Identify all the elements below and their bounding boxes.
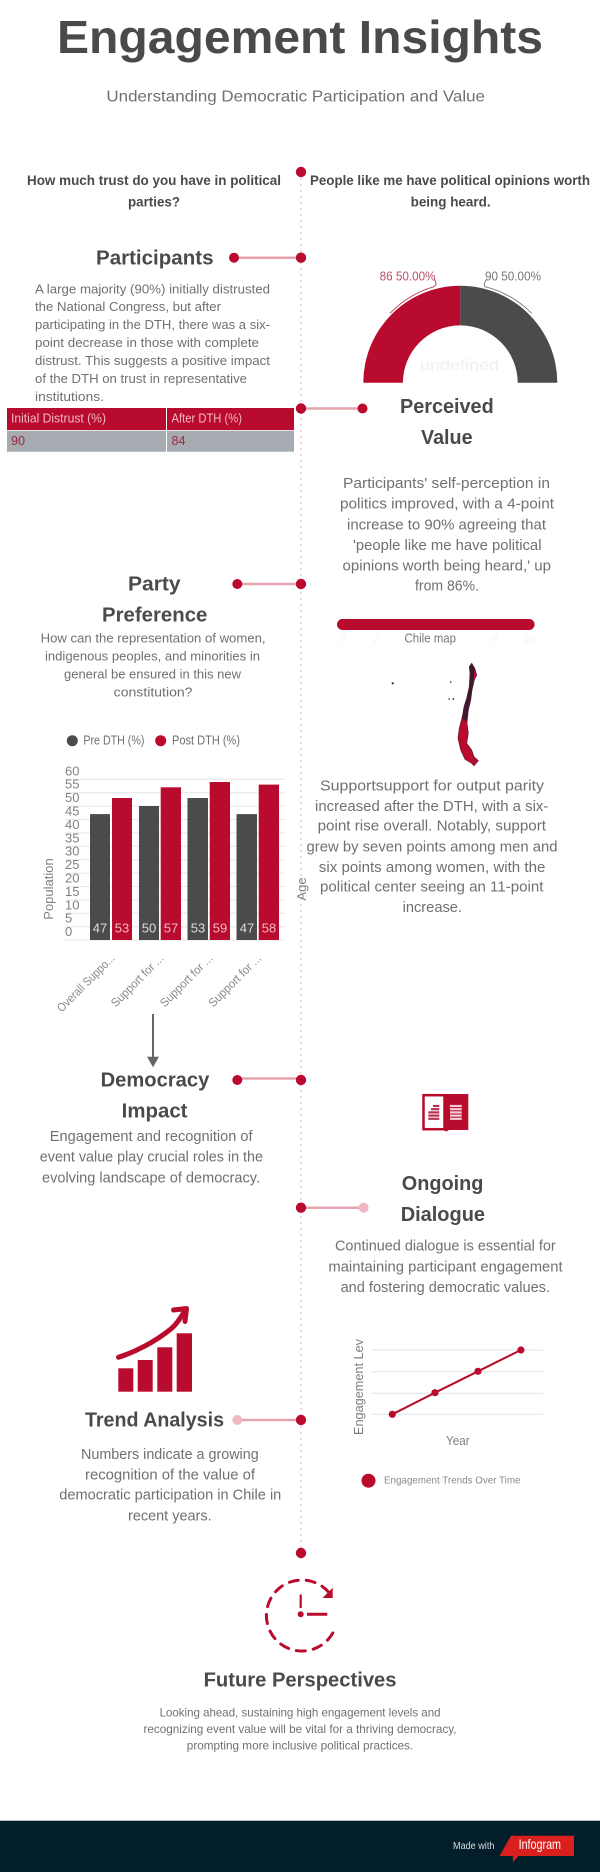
line chart: engagement trends: Year: [446, 1433, 470, 1448]
connector: democracy impact: [232, 1075, 306, 1085]
text: ongoing dialogue: maintaining participant engagement: [328, 1258, 563, 1275]
title: Engagement Insights: [57, 11, 543, 63]
heading: ongoing dialogue: Ongoing: [402, 1173, 483, 1195]
question: right: being heard.: [411, 194, 491, 210]
bar chart: 45: [65, 804, 79, 818]
bar chart: [41, 763, 285, 1015]
chile map progress bar: 2: [373, 634, 379, 646]
bar chart: 15: [65, 884, 79, 899]
text: future perspectives: prompting more inclusive political practices.: [187, 1738, 413, 1752]
question: left: [27, 172, 281, 210]
gauge chart: [363, 270, 557, 383]
bar chart: 0: [65, 924, 72, 939]
text: trend analysis: [59, 1446, 281, 1525]
question: left: How much trust do you have in political: [27, 172, 281, 188]
bar chart: 53: [191, 921, 205, 936]
text: party preference: general be ensured in this new: [64, 667, 242, 682]
question: right: People like me have political opinions worth: [310, 172, 590, 188]
chile map progress bar: Chile map: [404, 632, 456, 646]
text: democracy impact: evolving landscape of democracy.: [42, 1169, 260, 1186]
text: party preference: indigenous peoples, and minorities in: [45, 649, 260, 664]
bar chart: 10: [65, 897, 79, 912]
bar chart: Support for ...: [157, 951, 216, 1010]
heading: perceived value: Value: [421, 427, 473, 449]
text: support parity: [306, 778, 558, 916]
text: support parity: Supportsupport for output parity: [320, 778, 545, 795]
text: future perspectives: recognizing event value will be vital for a thriving democracy,: [144, 1722, 456, 1736]
text: democracy impact: [40, 1128, 263, 1186]
text: perceived value: increase to 90% agreeing that: [347, 516, 547, 533]
bar chart: 50: [65, 790, 79, 805]
text: support parity: increased after the DTH, with a six-: [315, 798, 548, 815]
bar chart: 25: [65, 857, 79, 872]
bar chart: 57: [164, 921, 178, 936]
connector: participants: [229, 253, 306, 263]
footer: Made with: [453, 1840, 495, 1852]
text: trend analysis: democratic participation in Chile in: [59, 1486, 281, 1503]
text: trend analysis: Numbers indicate a growing: [81, 1446, 259, 1463]
text: participants: distrust. This suggests a positive impact: [35, 353, 270, 368]
heading: perceived value: Perceived: [400, 396, 494, 418]
chile map progress bar: 8: [492, 634, 498, 646]
text: perceived value: politics improved, with a 4-point: [340, 496, 555, 513]
bar chart: 30: [65, 844, 79, 859]
text: support parity: point rise overall. Notably, support: [318, 818, 547, 835]
table: distrust: After DTH (%): [172, 412, 242, 426]
text: future perspectives: Looking ahead, sustaining high engagement levels and: [160, 1706, 440, 1720]
heading: ongoing dialogue: Dialogue: [401, 1204, 485, 1226]
table: distrust: 90: [11, 434, 25, 448]
legend: bar chart: Post DTH (%): [172, 734, 240, 748]
text: support parity: grew by seven points among men and: [306, 838, 558, 855]
text: participants: point decrease in those with complete: [35, 335, 259, 350]
icon: open book: [424, 1094, 468, 1132]
map: chile: [392, 663, 478, 766]
text: support parity: increase.: [403, 899, 462, 916]
bar chart: 5: [65, 911, 72, 926]
text: democracy impact: Engagement and recognition of: [50, 1128, 253, 1145]
connector: perceived value: [296, 403, 368, 414]
text: ongoing dialogue: [328, 1238, 563, 1296]
bar chart: 60: [65, 763, 79, 778]
footer: Infogram: [519, 1836, 561, 1852]
text: perceived value: opinions worth being heard,' up: [342, 558, 551, 575]
bar chart: 35: [65, 830, 79, 845]
chile map progress bar: [337, 619, 535, 646]
text: perceived value: [340, 475, 555, 595]
heading: democracy impact: Democracy: [101, 1070, 210, 1092]
footer: [0, 1821, 600, 1872]
text: perceived value: Participants' self-perception in: [343, 475, 550, 492]
text: participants: participating in the DTH, there was a six-: [35, 317, 270, 332]
heading: perceived value: [400, 396, 494, 449]
heading: party preference: Preference: [102, 605, 207, 627]
bar chart: Population: [41, 858, 56, 920]
text: support parity: six points among women, with the: [319, 859, 545, 876]
bar chart: Support for ...: [205, 951, 264, 1010]
text: participants: of the DTH on trust in representative: [35, 371, 247, 386]
heading: democracy impact: Impact: [122, 1101, 188, 1123]
line chart: engagement trends: [351, 1339, 543, 1448]
text: party preference: How can the representation of women,: [41, 631, 266, 646]
table: distrust: [7, 408, 294, 452]
axis label: age: Age: [294, 877, 309, 901]
bar chart: 50: [142, 921, 156, 936]
bar chart: 40: [65, 817, 79, 832]
bar chart: 55: [65, 777, 79, 792]
bar chart: 20: [65, 870, 79, 886]
text: party preference: [41, 631, 266, 700]
arrow: down: [147, 1014, 159, 1067]
text: perceived value: 'people like me have political: [353, 537, 542, 554]
timeline end dot: [296, 1548, 306, 1558]
gauge chart: undefined: [420, 358, 499, 374]
heading: party preference: Party: [128, 574, 182, 596]
gauge chart: 90 50.00%: [485, 270, 541, 284]
chile map progress bar: 0: [340, 634, 346, 646]
bar chart: Overall Suppo...: [54, 951, 118, 1015]
question: right: [310, 172, 590, 210]
legend: bar chart: Pre DTH (%): [83, 734, 144, 748]
text: support parity: political center seeing an 11-point: [320, 879, 544, 896]
text: participants: [35, 281, 270, 404]
icon: rising bars with arrow: [118, 1308, 192, 1392]
icon: clock with dashed circle: [266, 1580, 333, 1651]
text: participants: institutions.: [35, 389, 104, 404]
chile map progress bar: 10: [523, 634, 535, 646]
text: democracy impact: event value play crucial roles in the: [40, 1149, 263, 1166]
text: ongoing dialogue: Continued dialogue is essential for: [335, 1238, 556, 1255]
table: distrust: 84: [172, 434, 186, 448]
heading: trend analysis: Trend Analysis: [85, 1410, 224, 1432]
text: ongoing dialogue: and fostering democratic values.: [341, 1279, 550, 1296]
text: perceived value: from 86%.: [415, 578, 479, 595]
line chart: engagement trends: Engagement Lev: [351, 1339, 366, 1435]
bar chart: 53: [115, 921, 129, 936]
text: party preference: constitution?: [114, 685, 192, 700]
heading: participants: Participants: [96, 247, 214, 269]
text: trend analysis: recognition of the value of: [85, 1466, 256, 1483]
text: participants: A large majority (90%) initially distrusted: [35, 281, 270, 296]
subtitle: Understanding Democratic Participation and Value: [106, 89, 485, 106]
heading: future perspectives: Future Perspectives: [204, 1670, 396, 1692]
legend: line chart: Engagement Trends Over Time: [384, 1475, 521, 1487]
connector: ongoing dialogue: [296, 1202, 369, 1213]
timeline start dot: [296, 167, 306, 177]
bar chart: 47: [240, 921, 254, 936]
text: future perspectives: [144, 1706, 456, 1752]
heading: democracy impact: [101, 1070, 210, 1123]
table: distrust: Initial Distrust (%): [11, 412, 106, 426]
text: participants: the National Congress, but after: [35, 299, 222, 314]
heading: ongoing dialogue: [401, 1173, 485, 1226]
gauge chart: 86 50.00%: [380, 270, 436, 284]
bar chart: 59: [213, 921, 227, 936]
legend: bar chart: [67, 734, 240, 748]
heading: party preference: [102, 574, 207, 627]
connector: party preference: [232, 579, 306, 589]
bar chart: Support for ...: [108, 951, 167, 1010]
question: left: parties?: [128, 194, 180, 210]
text: trend analysis: recent years.: [128, 1508, 212, 1525]
bar chart: 47: [93, 921, 107, 936]
connector: trend analysis: [232, 1415, 306, 1425]
bar chart: 58: [262, 921, 276, 936]
